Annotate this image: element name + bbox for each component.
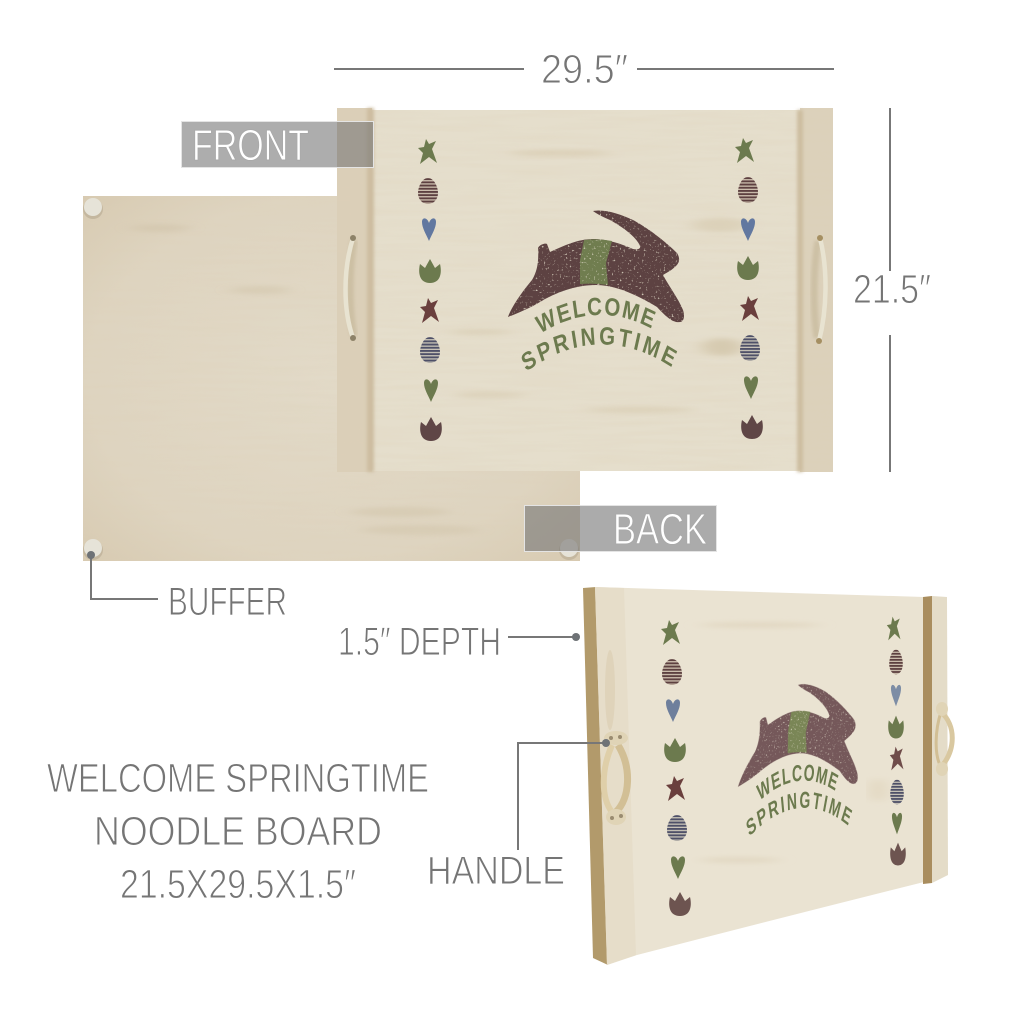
front label: FRONT [192, 121, 309, 170]
height dimension line [889, 108, 891, 472]
title [47, 755, 429, 907]
depth leader line [508, 633, 580, 641]
title: NOODLE BOARD [94, 808, 382, 854]
buffer bottom right [559, 539, 579, 560]
buffer leader line [87, 551, 158, 599]
perspective board [583, 587, 948, 965]
width dimension line [334, 68, 834, 70]
perspective rabbit and text [738, 684, 858, 834]
side edge [583, 587, 608, 965]
title: WELCOME SPRINGTIME [47, 755, 429, 801]
front board [337, 108, 833, 472]
handle leader line [518, 739, 610, 850]
perspective icons left [661, 620, 691, 916]
handle left [346, 235, 356, 341]
stencil text: SPRINGTIME [522, 327, 678, 370]
main panel [370, 110, 802, 471]
face [595, 587, 924, 965]
title: 21.5X29.5X1.5″ [120, 861, 356, 907]
perspective icons right [887, 617, 906, 865]
back label [524, 505, 716, 554]
stencil text [522, 298, 678, 370]
right groove [923, 596, 932, 884]
right batten [932, 596, 948, 883]
handle right [814, 235, 826, 344]
handle label: HANDLE [427, 849, 565, 893]
back label: BACK [613, 505, 707, 554]
icons: front left column [418, 139, 442, 441]
perspective handle left [604, 731, 628, 825]
buffer label: BUFFER [168, 580, 287, 624]
width value: 29.5″ [541, 46, 628, 92]
perspective rabbit and text: SPRINGTIME [746, 792, 852, 834]
rabbit stencil [508, 211, 684, 322]
buffer top [83, 198, 103, 219]
perspective handle right [936, 702, 952, 776]
stencil text: WELCOME [534, 298, 656, 332]
back board [83, 196, 580, 561]
icons: front right column [735, 138, 763, 439]
perspective rabbit and text: WELCOME [756, 764, 838, 799]
left batten [337, 108, 374, 472]
height value: 21.5″ [853, 266, 931, 312]
right batten [797, 108, 833, 472]
buffer bottom [83, 539, 103, 560]
depth label: 1.5″ DEPTH [338, 620, 501, 664]
